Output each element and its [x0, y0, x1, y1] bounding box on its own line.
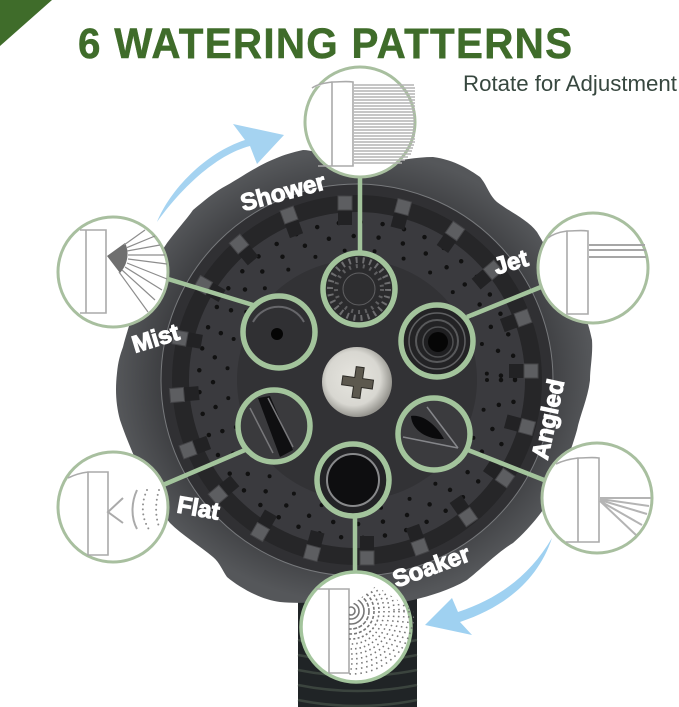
pattern: mist	[58, 217, 168, 327]
nozzle: shower	[323, 253, 395, 325]
label: angled: Angled	[527, 377, 570, 462]
nozzle: jet	[401, 305, 473, 377]
outer face	[189, 212, 525, 548]
retaining teeth	[169, 196, 538, 565]
subtitle: Rotate for Adjustment	[463, 71, 678, 96]
pattern: flat	[58, 452, 168, 562]
label: soaker: Soaker	[389, 541, 474, 593]
arrow: rotate lower	[425, 538, 552, 635]
label: shower: Shower	[238, 168, 328, 217]
center screw	[322, 347, 392, 417]
pattern: jet	[538, 213, 648, 323]
nozzle: mist	[243, 296, 315, 368]
label: mist: Mist	[129, 319, 183, 359]
nozzle: angled	[398, 398, 470, 470]
pattern: shower	[305, 67, 415, 177]
pattern: angled	[542, 443, 652, 553]
spray holes	[199, 222, 515, 538]
rim	[161, 184, 553, 576]
nozzle: soaker	[317, 444, 389, 516]
label: flat: Flat	[175, 492, 222, 526]
scalloped grip	[116, 150, 592, 603]
pattern: soaker	[299, 570, 414, 684]
hose	[298, 595, 417, 707]
nozzle body	[116, 150, 592, 603]
title: 6 WATERING PATTERNS	[78, 19, 572, 67]
nozzle: flat	[238, 390, 310, 462]
connector lines	[163, 175, 544, 575]
inner plate	[237, 260, 477, 500]
corner triangle	[0, 0, 52, 46]
arrow: rotate upper	[157, 124, 284, 222]
label: jet: Jet	[491, 245, 531, 281]
